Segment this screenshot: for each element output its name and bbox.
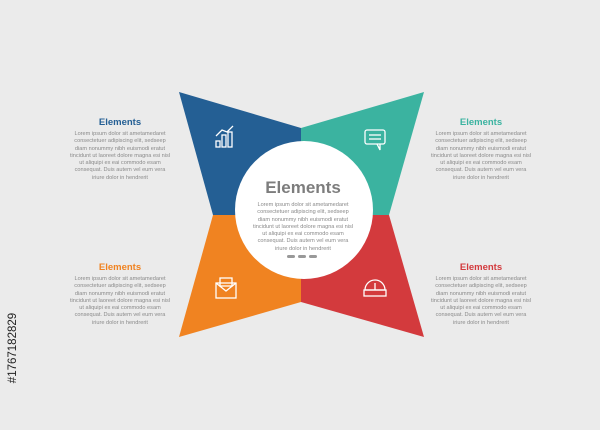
icon: chat bbox=[365, 130, 385, 150]
center text bbox=[253, 178, 353, 252]
center circle bbox=[235, 141, 373, 279]
center text: Elements bbox=[265, 178, 341, 197]
text block: top left: Elements bbox=[99, 117, 141, 128]
text block: top right: Lorem ipsum dolor sit ametamedaret consectetuer adipiscing elit, sedseep diam nonummy nibh euismodi eratut tincidunt ut laoreet dolore magna esi nisl ut aliquipi ex eai commodo esam consequat. Duis autem vel eum vera iriure dolor in hendrerit bbox=[431, 131, 531, 181]
icon: envelope bbox=[216, 278, 236, 298]
text block: bottom left: Elements bbox=[99, 262, 141, 273]
icon: chart bbox=[216, 126, 233, 147]
icon: protractor bbox=[364, 280, 386, 296]
text block: bottom right: Elements bbox=[460, 262, 502, 273]
text block: bottom right: Lorem ipsum dolor sit ametamedaret consectetuer adipiscing elit, sedseep diam nonummy nibh euismodi eratut tincidunt ut laoreet dolore magna esi nisl ut aliquipi ex eai commodo esam consequat. Duis autem vel eum vera iriure dolor in hendrerit bbox=[431, 276, 531, 326]
text block: bottom left: Lorem ipsum dolor sit ametamedaret consectetuer adipiscing elit, sedseep diam nonummy nibh euismodi eratut tincidunt ut laoreet dolore magna esi nisl ut aliquipi ex eai commodo esam consequat. Duis autem vel eum vera iriure dolor in hendrerit bbox=[70, 276, 170, 326]
segment: blue bbox=[179, 92, 301, 215]
segment: orange bbox=[179, 215, 301, 337]
segment: teal bbox=[301, 92, 424, 215]
segment: red bbox=[301, 215, 424, 337]
text block: top left: Lorem ipsum dolor sit ametamedaret consectetuer adipiscing elit, sedseep diam nonummy nibh euismodi eratut tincidunt ut laoreet dolore magna esi nisl ut aliquipi ex eai commodo esam consequat. Duis autem vel eum vera iriure dolor in hendrerit bbox=[70, 131, 170, 181]
stock id: #1767182829 bbox=[7, 313, 19, 383]
text block: top right: Elements bbox=[460, 117, 502, 128]
center text: Lorem ipsum dolor sit ametamedaret consectetuer adipiscing elit, sedseep diam nonummy nibh euismodi eratut tincidunt ut laoreet dolore magna esi nisl ut aliquipi ex eai commodo esam consequat. Duis autem vel eum vera iriure dolor in hendrerit bbox=[253, 202, 353, 252]
dots bbox=[287, 255, 317, 258]
